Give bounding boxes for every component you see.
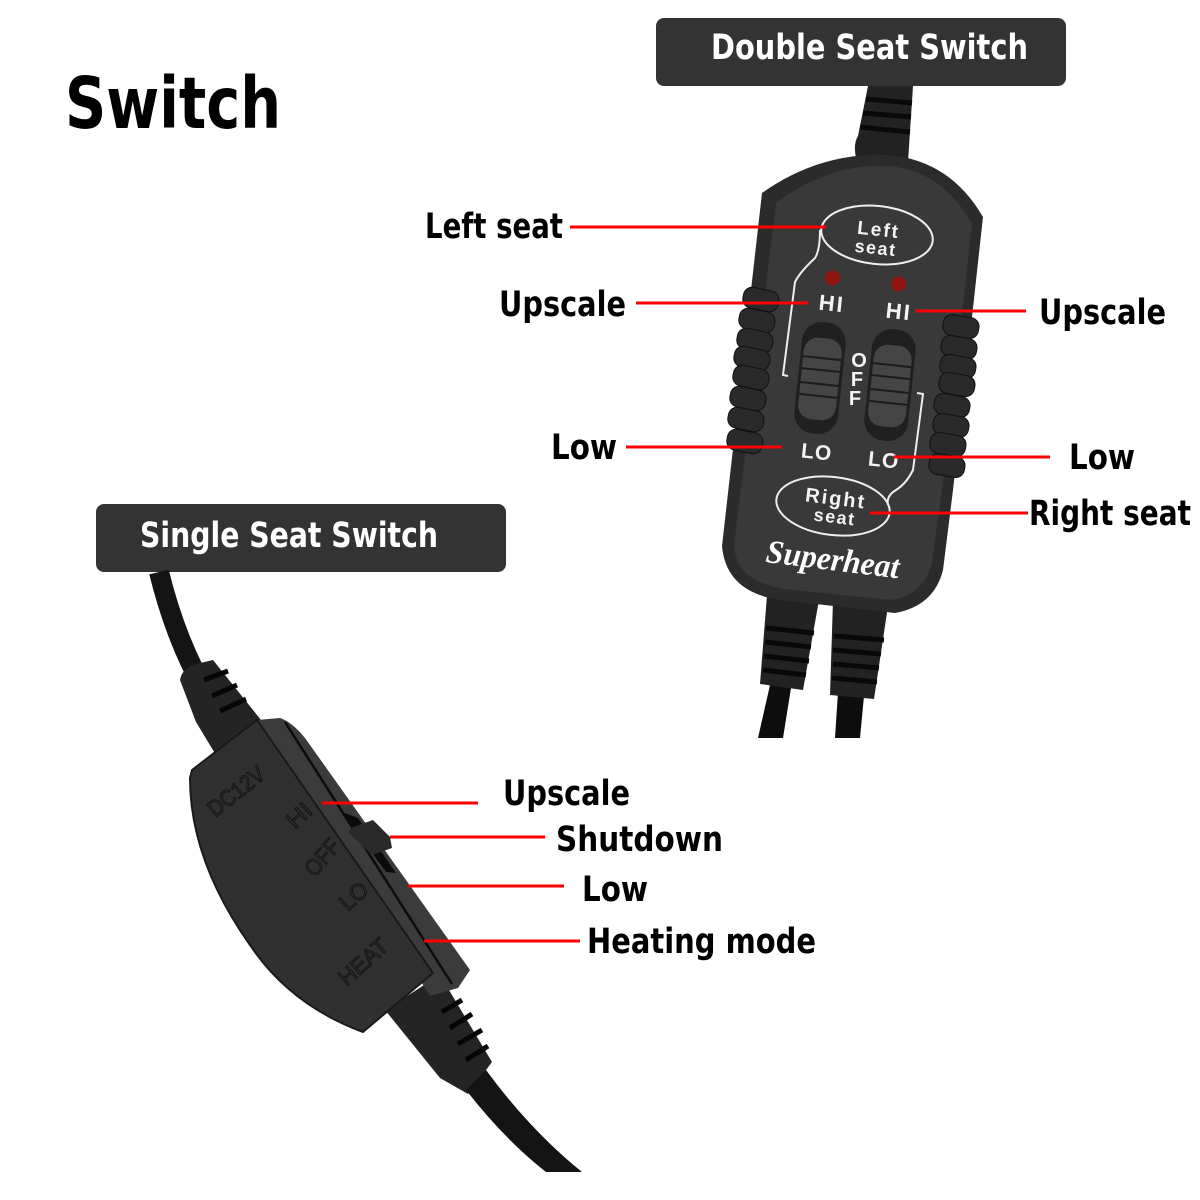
- switch side face: [257, 718, 470, 996]
- right seat oval: Right: [804, 484, 867, 514]
- switch body: [190, 720, 433, 1032]
- body markings: DC12V: [202, 760, 271, 822]
- HI / OFF / LO markings: F: [851, 369, 863, 391]
- slider left: [792, 320, 848, 436]
- heading: double seat switch: [656, 18, 1066, 86]
- switch body: [722, 155, 983, 613]
- callout: shutdown: Shutdown: [556, 820, 723, 860]
- upper strain relief: [180, 660, 265, 770]
- LED indicators: [824, 270, 906, 292]
- HI / OFF / LO markings: LO: [867, 447, 900, 474]
- left seat oval: seat: [854, 236, 898, 260]
- callout: low right: Low: [1069, 438, 1135, 478]
- left side grip: [725, 285, 781, 456]
- HI / OFF / LO markings: F: [849, 388, 861, 410]
- right side grip: [927, 313, 980, 479]
- switch face: [734, 166, 972, 600]
- top cable strain relief: [855, 86, 913, 162]
- bracket lines: [783, 230, 923, 505]
- body markings: HI: [281, 797, 317, 834]
- side seam: [285, 722, 452, 984]
- upper cable: [159, 572, 193, 668]
- HI / OFF / LO markings: HI: [818, 290, 846, 317]
- body markings: HEAT: [333, 933, 393, 991]
- heading: single seat switch: Single Seat Switch: [140, 516, 438, 556]
- left seat oval: Left: [856, 218, 901, 243]
- single seat switch device: [159, 572, 582, 1172]
- callout: single low: Low: [582, 870, 648, 910]
- callout: heating mode: Heating mode: [587, 922, 816, 962]
- callout: single upscale: Upscale: [503, 774, 630, 814]
- callout: left seat: Left seat: [425, 207, 563, 247]
- body markings: OFF: [299, 833, 345, 881]
- lower strain relief: [385, 975, 492, 1094]
- slider slot: [342, 812, 396, 873]
- body markings: LO: [334, 876, 374, 916]
- right seat oval: seat: [813, 505, 857, 530]
- double seat switch device: [722, 86, 983, 738]
- HI / OFF / LO markings: HI: [885, 298, 913, 325]
- left seat oval: [818, 200, 936, 270]
- callout: upscale left: Upscale: [499, 285, 626, 325]
- title: Switch: [65, 62, 281, 145]
- lower cable: [466, 1070, 582, 1172]
- bottom cables: [758, 595, 888, 738]
- callout: low left: Low: [551, 428, 617, 468]
- HI / OFF / LO markings: LO: [800, 439, 833, 466]
- callout: upscale right: Upscale: [1039, 293, 1166, 333]
- HI / OFF / LO markings: O: [851, 350, 867, 372]
- body markings: [202, 760, 393, 991]
- brand logo: Superheat: [764, 534, 902, 586]
- slider knob: [348, 820, 392, 855]
- heading: double seat switch: Double Seat Switch: [711, 28, 1028, 68]
- right seat oval: [773, 470, 893, 542]
- heading: single seat switch: [96, 504, 506, 572]
- HI / OFF / LO markings: [800, 290, 913, 474]
- slider right: [862, 327, 918, 443]
